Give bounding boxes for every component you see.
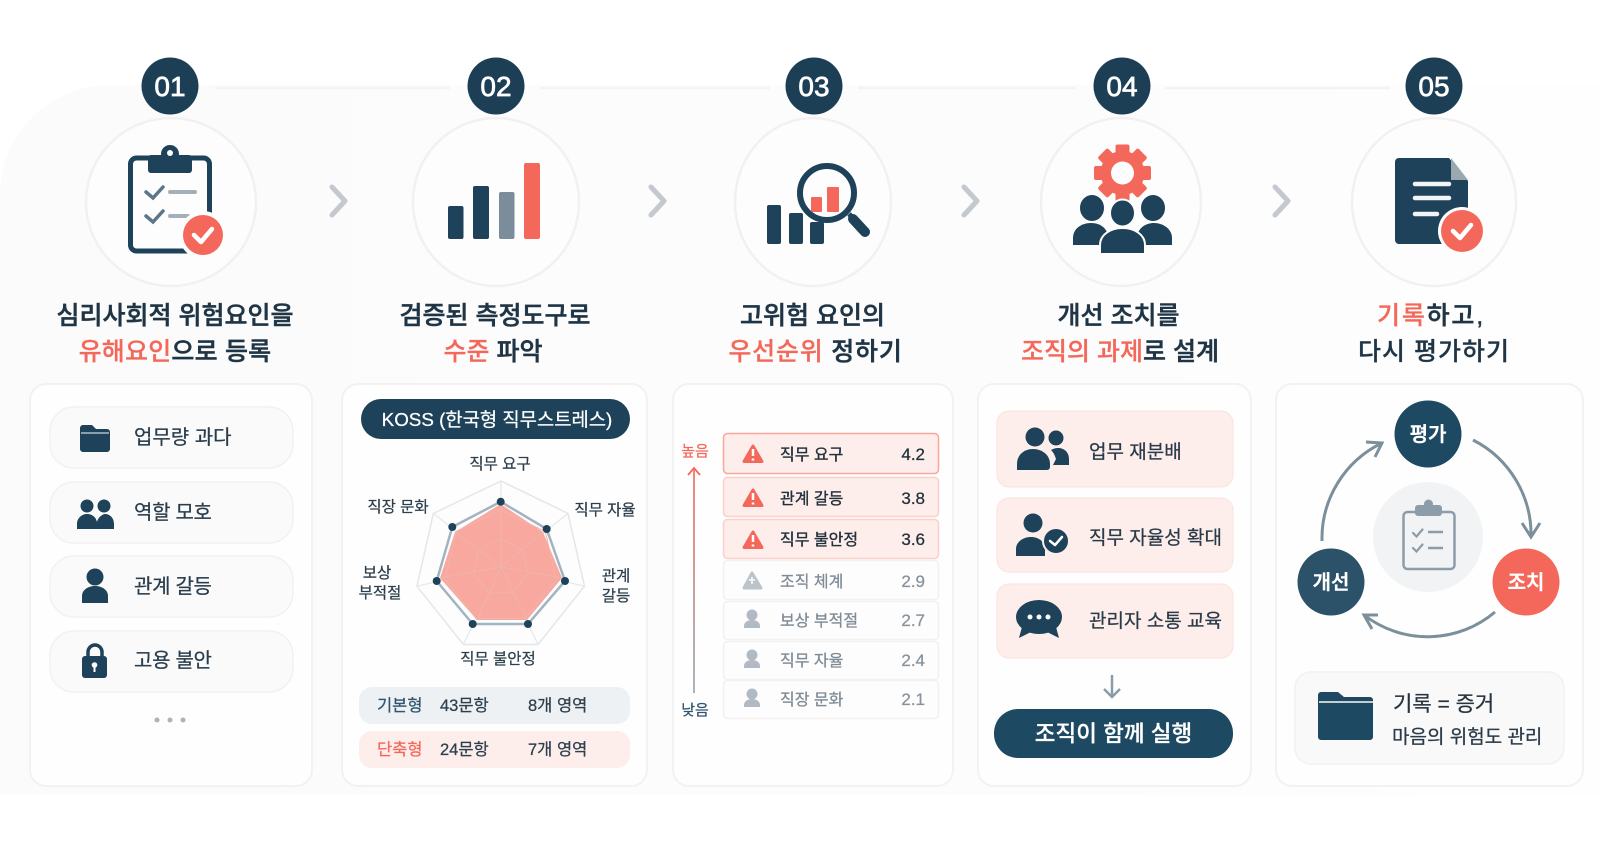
basic type row xyxy=(359,687,630,724)
cycle node: improvement: 개선 xyxy=(1313,571,1349,594)
panel: hazard registration list xyxy=(30,384,312,786)
heading: step 4: 조직의 과제로 설계 xyxy=(1021,338,1219,366)
short type row xyxy=(359,731,630,768)
step 05 number badge: 05 xyxy=(1418,71,1450,102)
step 04 number badge xyxy=(1094,58,1150,114)
rank row: workplace culture: 2.1 xyxy=(901,690,925,709)
heading: step 2 xyxy=(400,302,590,366)
list item: workload xyxy=(50,407,293,468)
rank row: relationship conflict: 관계 갈등 xyxy=(780,490,843,508)
rank row: job autonomy: 2.4 xyxy=(901,651,925,670)
heading: step 4 xyxy=(1021,302,1219,366)
heading: step 4: 개선 조치를 xyxy=(1058,302,1179,330)
radar axis labels: 직무 불안정 xyxy=(460,650,536,668)
basic type row: 8개 영역 xyxy=(528,696,587,715)
callout: record equals evidence: 마음의 위험도 관리 xyxy=(1392,726,1542,748)
heading: step 5 xyxy=(1358,302,1510,366)
arrow: step 2 to 3 xyxy=(651,187,664,215)
rank row: job demand: 4.2 xyxy=(901,445,925,464)
action: redistribute work xyxy=(997,411,1233,487)
radar axis labels: 부적절 xyxy=(359,584,401,602)
panel: organizational actions xyxy=(978,384,1251,786)
heading: step 5: 기록하고, xyxy=(1377,302,1485,330)
rank row: job demand xyxy=(724,434,938,474)
step 03 number badge xyxy=(786,58,842,114)
radar axis labels: 직무 자율 xyxy=(574,501,636,519)
heading: step 3 xyxy=(728,302,903,366)
icon: document with check xyxy=(1352,118,1516,286)
rank row: job insecurity: 직무 불안정 xyxy=(780,531,858,549)
KOSS title pill: KOSS (한국형 직무스트레스) xyxy=(382,409,612,430)
rank row: inadequate reward: 보상 부적절 xyxy=(780,612,858,630)
cycle node: evaluation xyxy=(1394,400,1462,468)
panel: KOSS radar chart xyxy=(342,384,647,786)
radar chart xyxy=(417,481,584,644)
rank row: organization system: 2.9 xyxy=(901,572,925,591)
rank row: job demand: 직무 요구 xyxy=(780,446,843,464)
list item: workload: 업무량 과다 xyxy=(134,426,232,449)
icon: bar chart xyxy=(413,118,579,286)
action: redistribute work: 업무 재분배 xyxy=(1089,441,1182,463)
step 05 number badge xyxy=(1406,58,1462,114)
step 04 number badge: 04 xyxy=(1106,71,1138,102)
panel: evaluation cycle xyxy=(1276,384,1583,786)
priority axis arrow xyxy=(681,443,709,719)
basic type row: 43문항 xyxy=(440,696,489,715)
more indicator xyxy=(154,718,186,722)
rank row: inadequate reward xyxy=(724,602,938,640)
KOSS title pill xyxy=(361,399,630,439)
radar axis labels: 직무 요구 xyxy=(469,455,531,473)
icon: clipboard with check xyxy=(86,118,256,286)
heading: step 1 xyxy=(57,302,293,366)
radar axis labels xyxy=(359,455,636,668)
heading: step 1: 유해요인으로 등록 xyxy=(79,338,271,366)
arrow: step 3 to 4 xyxy=(964,187,977,215)
short type row: 7개 영역 xyxy=(528,740,587,759)
pill: act together xyxy=(994,709,1233,758)
rank row: inadequate reward: 2.7 xyxy=(901,611,925,630)
list item: job insecurity: 고용 불안 xyxy=(134,649,212,672)
rank row: job autonomy xyxy=(724,642,938,680)
radar axis labels: 갈등 xyxy=(602,587,630,605)
callout: record equals evidence xyxy=(1295,672,1564,764)
rank row: organization system: 조직 체계 xyxy=(780,573,843,591)
list item: relationship conflict xyxy=(50,556,293,617)
pill: act together: 조직이 함께 실행 xyxy=(1035,722,1192,746)
heading: step 3: 고위험 요인의 xyxy=(740,302,885,330)
heading: step 2: 수준 파악 xyxy=(444,338,542,366)
cycle node: action xyxy=(1492,548,1560,616)
heading: step 2: 검증된 측정도구로 xyxy=(400,302,590,330)
short type row: 24문항 xyxy=(440,740,489,759)
priority axis arrow: 높음 xyxy=(681,443,709,460)
cycle arrow: improvement to evaluation xyxy=(1322,442,1382,541)
action: expand autonomy xyxy=(997,498,1233,572)
heading: step 5: 다시 평가하기 xyxy=(1358,338,1510,366)
action: expand autonomy: 직무 자율성 확대 xyxy=(1089,527,1222,549)
heading: step 1: 심리사회적 위험요인을 xyxy=(57,302,293,330)
rank row: workplace culture: 직장 문화 xyxy=(780,691,844,709)
rank row: job insecurity: 3.6 xyxy=(901,530,925,549)
rank row: organization system xyxy=(724,560,938,600)
icon: gear over team xyxy=(1041,118,1201,286)
list item: job insecurity xyxy=(50,631,293,692)
arrow: step 1 to 2 xyxy=(332,187,345,215)
step 02 number badge: 02 xyxy=(480,71,512,102)
rank row: relationship conflict xyxy=(724,478,938,516)
rank row: relationship conflict: 3.8 xyxy=(901,489,925,508)
action: manager communication training xyxy=(997,584,1233,658)
list item: relationship conflict: 관계 갈등 xyxy=(134,575,212,598)
cycle arrow: action to improvement xyxy=(1364,612,1495,637)
arrow: step 4 to 5 xyxy=(1275,187,1288,215)
list item: role ambiguity: 역할 모호 xyxy=(134,501,212,524)
priority axis arrow: 낮음 xyxy=(681,702,709,719)
radar axis labels: 관계 xyxy=(602,567,630,585)
rank row: job autonomy: 직무 자율 xyxy=(780,652,843,670)
list item: role ambiguity xyxy=(50,482,293,543)
panel: priority ranking xyxy=(673,384,953,786)
step 01 number badge: 01 xyxy=(154,71,186,102)
step 02 number badge xyxy=(468,58,524,114)
radar axis labels: 보상 xyxy=(363,564,391,582)
rank row: workplace culture xyxy=(724,680,938,718)
cycle center clipboard xyxy=(1373,482,1483,592)
short type row: 단축형 xyxy=(377,740,423,759)
heading: step 3: 우선순위 정하기 xyxy=(728,338,903,366)
icon: magnifier over bars xyxy=(735,118,891,286)
cycle node: evaluation: 평가 xyxy=(1410,423,1446,446)
radar axis labels: 직장 문화 xyxy=(367,498,429,516)
rank row: job insecurity xyxy=(724,520,938,558)
action: manager communication training: 관리자 소통 교육 xyxy=(1089,610,1222,632)
callout: record equals evidence: 기록 = 증거 xyxy=(1393,693,1494,716)
basic type row: 기본형 xyxy=(377,696,423,715)
step 01 number badge xyxy=(142,58,198,114)
cycle arrow: evaluation to action xyxy=(1473,440,1540,537)
arrow: down xyxy=(1104,675,1120,697)
cycle node: action: 조치 xyxy=(1508,571,1544,594)
step 03 number badge: 03 xyxy=(798,71,830,102)
cycle node: improvement xyxy=(1298,548,1364,616)
